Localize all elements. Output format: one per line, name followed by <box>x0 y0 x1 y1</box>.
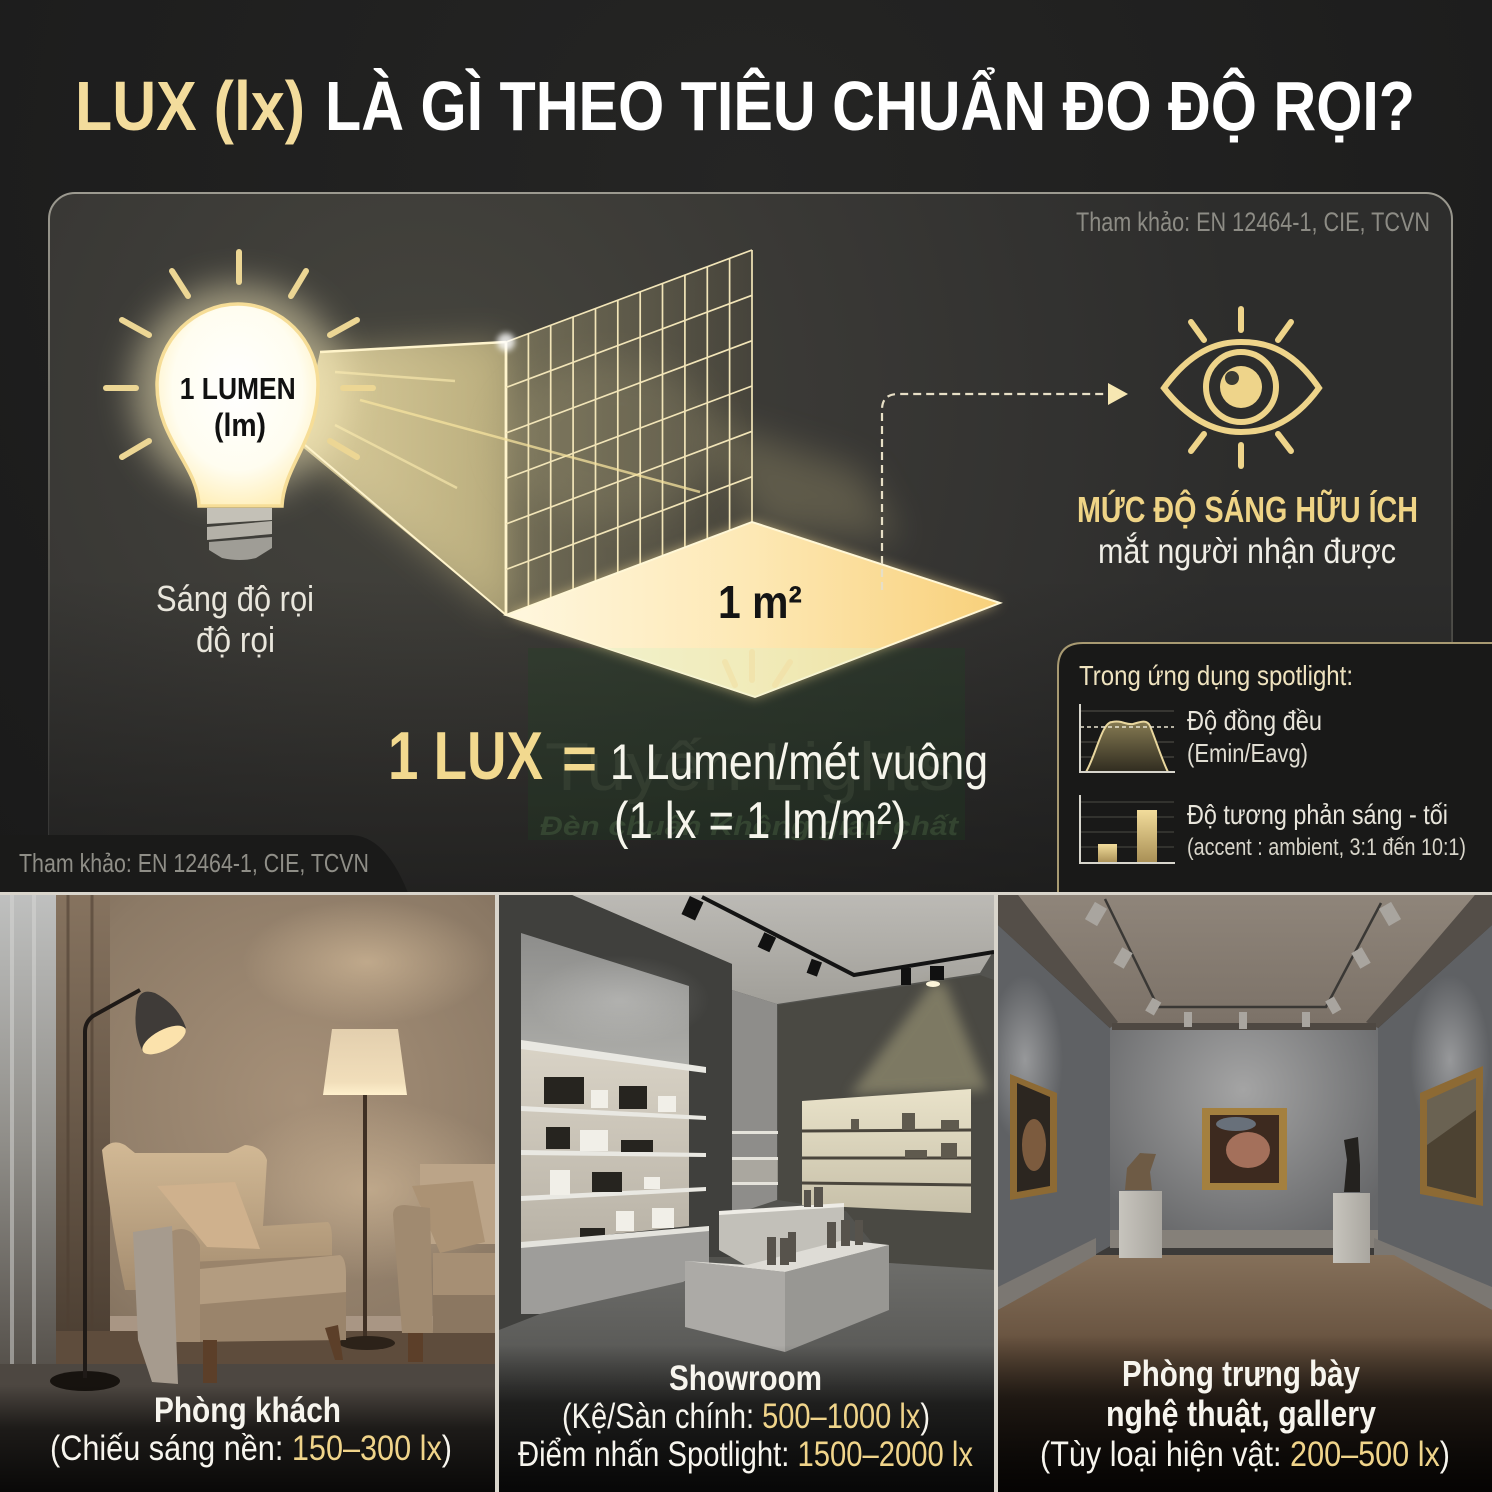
bright ray through the grid <box>360 400 700 492</box>
dividers <box>0 892 1492 1492</box>
bulb text: 1 LUMEN <box>180 371 296 406</box>
watermark: Tuyến Lights <box>545 729 955 805</box>
spotlight application box: Độ tương phản sáng - tối <box>1187 799 1448 830</box>
gap wall <box>732 990 777 1215</box>
reference tag bottom left: Tham khảo: EN 12464-1, CIE, TCVN <box>19 848 369 878</box>
right wall <box>778 975 994 1270</box>
left painting <box>1010 1074 1057 1200</box>
formula: (1 lx = 1 lm/m²) <box>614 792 906 850</box>
formula: 1 LUX <box>388 718 543 794</box>
moldings <box>998 895 1492 1310</box>
watermark <box>528 648 965 841</box>
icon: eye <box>1164 309 1319 466</box>
caption under bulb: Sáng độ rọi <box>156 578 314 619</box>
caption under bulb <box>156 578 314 660</box>
eye caption: MỨC ĐỘ SÁNG HỮU ÍCH <box>1077 488 1418 530</box>
light beam <box>300 342 506 615</box>
illuminated 1 m2 floor <box>506 522 1000 697</box>
center display <box>685 1187 889 1352</box>
arrow: dashed to eye <box>882 383 1128 590</box>
formula: 1 Lumen/mét vuông <box>610 734 988 790</box>
center painting <box>1202 1108 1287 1190</box>
icon: light bulb with 1 lumen <box>106 252 373 560</box>
caption: gallery: Phòng trưng bày <box>1122 1353 1360 1394</box>
floor <box>0 1316 495 1474</box>
spotlight application box: Trong ứng dụng spotlight: <box>1079 660 1353 691</box>
photo: living room <box>0 895 520 1492</box>
panel: lux definition <box>0 193 1492 913</box>
left wall niche <box>521 933 689 1070</box>
right wall lit shelves <box>802 1089 971 1213</box>
ceiling <box>572 895 994 1004</box>
track lights <box>681 896 994 987</box>
reference tag bottom left <box>0 835 408 893</box>
floor lamp right <box>323 1029 407 1350</box>
floor <box>499 1263 994 1352</box>
right painting <box>1420 1066 1483 1206</box>
formula: = <box>562 725 597 792</box>
caption: living room: (Chiếu sáng nền: 150–300 lx) <box>50 1429 452 1468</box>
curtains <box>0 895 110 1395</box>
sofa <box>393 1164 495 1362</box>
dark frame <box>499 895 732 1330</box>
caption: gallery <box>1040 1353 1450 1474</box>
illuminated 1 m2 floor: 1 m² <box>718 576 802 628</box>
title: LUX (lx) <box>75 67 305 145</box>
bulb text: (lm) <box>214 407 266 443</box>
caption: living room <box>50 1391 452 1468</box>
armchair <box>102 1142 346 1384</box>
spotlight application box: Độ đồng đều <box>1187 705 1322 736</box>
eye caption <box>1077 488 1418 571</box>
caption: gallery: nghệ thuật, gallery <box>1106 1393 1376 1434</box>
caption: showroom: (Kệ/Sàn chính: 500–1000 lx) <box>562 1397 930 1436</box>
caption: living room: Phòng khách <box>154 1391 341 1430</box>
photo: gallery <box>987 895 1492 1492</box>
pedestals and sculptures <box>1119 1137 1370 1263</box>
eye caption: mắt người nhận được <box>1098 532 1396 571</box>
spotlight application box <box>1058 643 1492 893</box>
caption: showroom <box>518 1359 973 1474</box>
caption: showroom: Điểm nhấn Spotlight: 1500–2000 lx <box>518 1435 973 1474</box>
track lights <box>1085 899 1401 1029</box>
wood floor <box>998 1255 1492 1396</box>
floor lamp left <box>50 990 190 1391</box>
caption under bulb: độ rọi <box>196 619 275 660</box>
spotlight application box: (Emin/Eavg) <box>1187 738 1308 768</box>
watermark: Đèn chuẩn Không gian chất <box>540 811 959 841</box>
photo: showroom <box>499 895 994 1492</box>
caption: gallery: (Tùy loại hiện vật: 200–500 lx) <box>1040 1435 1450 1474</box>
left shelves <box>521 1040 709 1314</box>
grid wall <box>360 250 900 615</box>
chart: uniformity <box>1080 704 1175 772</box>
formula <box>388 718 988 850</box>
chart: contrast <box>1080 795 1175 863</box>
caption: showroom: Showroom <box>669 1359 822 1398</box>
lower cabinet <box>521 1228 709 1314</box>
